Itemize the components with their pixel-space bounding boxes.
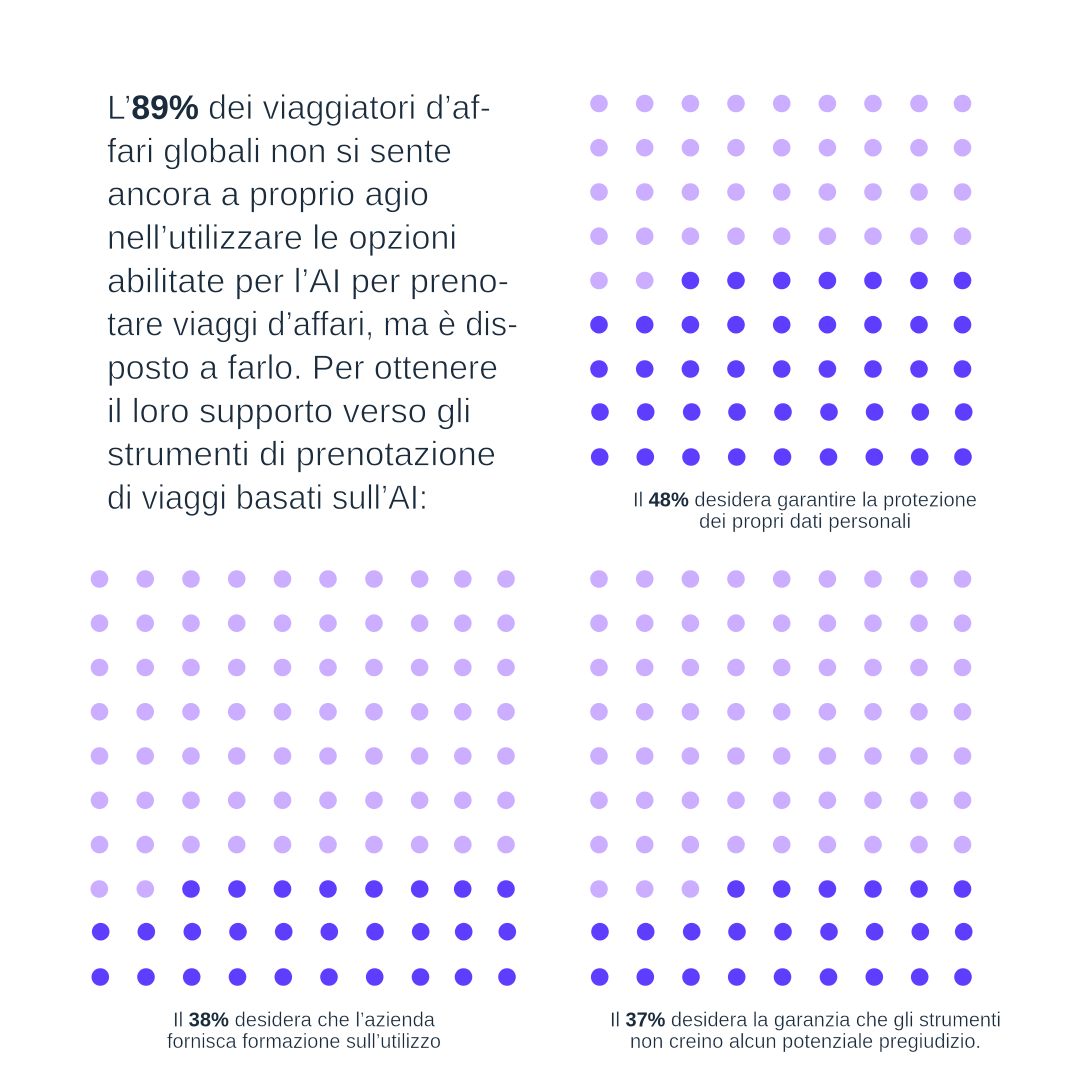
- dot chart: 48%: [590, 95, 972, 466]
- intro text block: ancora a proprio agio: [107, 176, 429, 214]
- caption: 37%: non creino alcun potenziale pregiudizio.: [630, 1031, 981, 1053]
- caption: 37%: Il 37% desidera la garanzia che gli strumenti: [610, 1010, 1001, 1032]
- intro text block: tare viaggi d’affari, ma è dis-: [107, 306, 518, 344]
- intro text block: fari globali non si sente: [107, 132, 452, 170]
- caption: 48%: [633, 490, 977, 533]
- intro text block: il loro supporto verso gli: [107, 392, 471, 430]
- caption: 37%: [610, 1010, 1001, 1053]
- caption: 38%: [167, 1010, 441, 1053]
- intro text block: [107, 89, 518, 517]
- intro text block: posto a farlo. Per ottenere: [107, 349, 498, 387]
- caption: 38%: Il 38% desidera che l’azienda: [173, 1010, 436, 1032]
- intro text block: di viaggi basati sull’AI:: [107, 479, 428, 517]
- intro text block: L’89% dei viaggiatori d’af-: [107, 89, 491, 127]
- dot chart: 38%: [90, 570, 516, 986]
- dot chart: 37%: [590, 570, 972, 986]
- caption: 48%: Il 48% desidera garantire la protezione: [633, 490, 977, 512]
- intro text block: strumenti di prenotazione: [107, 436, 496, 474]
- intro text block: nell’utilizzare le opzioni: [107, 219, 457, 257]
- intro text block: abilitate per l’AI per preno-: [107, 262, 509, 300]
- caption: 38%: fornisca formazione sull’utilizzo: [167, 1031, 441, 1053]
- caption: 48%: dei propri dati personali: [699, 511, 911, 533]
